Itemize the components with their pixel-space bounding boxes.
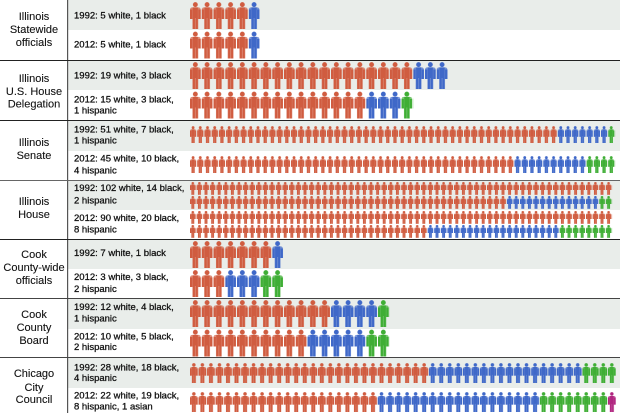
text: 2012 county-wide counts: 2012: 3 white, 3 black, (74, 272, 169, 283)
pictogram: 2012 city council (190, 392, 616, 412)
pictogram: 1992 county-wide (190, 241, 284, 268)
text: 1992 Senate counts: 1 hispanic (74, 136, 117, 146)
heading: Cook County Board: Cook (21, 309, 47, 321)
text: 2012 U.S. House counts: 1 hispanic (74, 106, 117, 116)
heading: Cook County-wide officials: Cook (21, 249, 47, 261)
text: 2012 House counts: 8 hispanic (74, 224, 117, 236)
heading: Cook County-wide officials: officials (16, 275, 53, 287)
panel: Cook County Board (17, 299, 620, 356)
pictogram: 1992 city council (190, 363, 616, 383)
heading: Illinois Statewide officials: officials (16, 37, 53, 49)
pictogram: 1992 county board (190, 300, 390, 327)
text: 1992 Senate counts: 1992: 51 white, 7 black, (74, 124, 174, 136)
panel: Illinois Senate (17, 121, 620, 176)
text: 2012 city council counts: 2012: 22 white, 19 black, (74, 390, 179, 402)
text: 2012 county board counts: 2 hispanic (74, 342, 117, 353)
heading: Illinois Senate: Illinois (19, 137, 50, 149)
text: 1992 county board counts: 1 hispanic (74, 314, 117, 324)
heading: Illinois Statewide officials: Statewide (10, 24, 58, 36)
text: 2012 statewide counts: 2012: 5 white, 1 black (74, 40, 166, 50)
text: 1992 statewide counts: 1992: 5 white, 1 black (74, 10, 166, 22)
heading: Cook County Board: County (17, 322, 52, 334)
pictogram: 2012 House (190, 211, 612, 238)
pictogram: 1992 Senate (190, 126, 615, 143)
heading: Chicago City Council: City (25, 382, 44, 394)
pictogram: 2012 Senate (190, 156, 615, 173)
panel: Chicago City Council (14, 358, 620, 412)
heading: Cook County-wide officials: County-wide (3, 262, 65, 274)
text: 1992 city council counts: 4 hispanic (74, 373, 117, 384)
text: 2012 city council counts: 8 hispanic, 1 asian (74, 402, 153, 412)
heading: Chicago City Council: Chicago (14, 368, 54, 380)
heading: Illinois House: Illinois (19, 196, 50, 208)
text: 1992 House counts: 1992: 102 white, 14 black, (74, 183, 184, 194)
pictogram: 2012 county-wide (190, 270, 284, 297)
heading: Illinois Statewide officials: Illinois (19, 11, 50, 23)
heading: Chicago City Council: Council (16, 394, 52, 406)
pictogram: 1992 House (190, 182, 612, 209)
heading: Illinois U.S. House Delegation: Delegation (8, 98, 60, 110)
pictogram: 2012 U.S. House (190, 92, 413, 118)
heading: Illinois Senate: Senate (17, 150, 51, 162)
text: 1992 county-wide counts: 1992: 7 white, 1 black (74, 248, 166, 259)
pictogram: 1992 U.S. House (190, 62, 448, 89)
heading: Illinois U.S. House Delegation: Illinois (19, 73, 50, 85)
panel: Illinois House (18, 181, 620, 238)
text: 2012 Senate counts: 2012: 45 white, 10 black, (74, 154, 179, 164)
heading: Illinois House: House (18, 209, 50, 221)
text: 1992 county board counts: 1992: 12 white, 4 black, (74, 302, 174, 313)
heading: Cook County Board: Board (19, 335, 49, 347)
heading: Illinois U.S. House Delegation: U.S. House (6, 86, 62, 98)
text: 1992 House counts: 2 hispanic (74, 196, 117, 206)
panel: Cook County-wide officials (3, 240, 620, 297)
pictogram: 1992 statewide (190, 2, 260, 29)
text: 2012 House counts: 2012: 90 white, 20 black, (74, 213, 179, 224)
text: 1992 U.S. House counts: 1992: 19 white, 3 black (74, 70, 171, 82)
text: 2012 county board counts: 2012: 10 white, 5 black, (74, 332, 174, 342)
text: 2012 Senate counts: 4 hispanic (74, 166, 117, 176)
text: 2012 county-wide counts: 2 hispanic (74, 284, 117, 295)
pictogram: 2012 county board (190, 330, 390, 356)
panel: Illinois U.S. House Delegation (6, 61, 620, 118)
text: 1992 city council counts: 1992: 28 white, 18 black, (74, 362, 179, 374)
pictogram: 2012 statewide (190, 32, 260, 58)
text: 2012 U.S. House counts: 2012: 15 white, 3 black, (74, 94, 174, 106)
panel: Illinois Statewide officials (10, 0, 620, 58)
